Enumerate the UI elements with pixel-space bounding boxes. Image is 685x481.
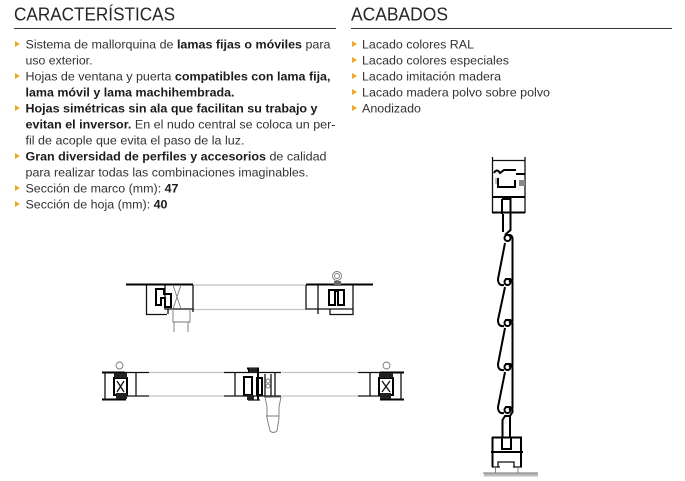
central handle — [265, 397, 281, 432]
right eye fitting — [332, 272, 342, 286]
top box — [492, 157, 525, 213]
left profile — [156, 289, 171, 307]
right fitting — [379, 362, 393, 399]
item: simétricas: Hojas simétricas sin ala que facilitan su trabajo y — [26, 102, 318, 116]
right profile — [329, 290, 344, 305]
finish: madera: Lacado imitación madera — [362, 70, 501, 84]
left transom outline — [173, 285, 190, 332]
item: lamas: Sistema de mallorquina de lamas fijas o móviles para — [26, 38, 331, 52]
item: hojas: Hojas de ventana y puerta compatibles con lama fija, — [26, 70, 330, 84]
left frame — [146, 285, 193, 314]
bottom frame — [491, 437, 523, 467]
top gasket — [496, 174, 525, 186]
drawing: horizontal section, bottom — [102, 362, 404, 432]
heading rule — [351, 28, 672, 29]
item: marco: Sección de marco (mm): 47 — [26, 182, 179, 196]
fixing feet — [496, 468, 518, 473]
glass lines — [193, 285, 306, 310]
item: hoja: Sección de hoja (mm): 40 — [26, 198, 168, 212]
feature list — [15, 38, 336, 212]
heading: características: CARACTERÍSTICAS — [14, 4, 175, 24]
item: perfiles, line 2: para realizar todas las combinaciones imaginables. — [26, 166, 308, 180]
finish: especiales: Lacado colores especiales — [362, 54, 509, 68]
item: lamas, line 2: uso exterior. — [26, 54, 92, 68]
item: hojas, line 2: lama móvil y lama machihembrada. — [26, 86, 234, 100]
louvers — [498, 235, 513, 416]
central mullion — [224, 368, 281, 400]
right leaf — [380, 372, 404, 400]
right frame — [306, 285, 353, 314]
item: simétricas, line 3: fil de acople que evita el paso de la luz. — [26, 134, 244, 148]
panel: características — [14, 4, 336, 212]
finish: RAL: Lacado colores RAL — [362, 38, 474, 52]
panel: acabados — [351, 4, 672, 116]
finishes list — [352, 38, 550, 116]
lower stile — [502, 416, 510, 437]
finish: polvo sobre polvo: Lacado madera polvo sobre polvo — [362, 86, 550, 100]
left top flange — [126, 284, 193, 286]
bullet markers — [15, 41, 20, 207]
drawing: vertical section — [483, 157, 538, 476]
leaf head — [492, 197, 525, 214]
left leaf — [102, 372, 126, 400]
item: perfiles: Gran diversidad de perfiles y accesorios de calidad — [26, 150, 327, 164]
top channel — [494, 170, 516, 187]
hatched ground — [483, 472, 538, 476]
left fitting — [114, 362, 127, 399]
heading rule — [14, 28, 336, 29]
right top flange — [306, 284, 373, 286]
upper stile — [503, 214, 510, 235]
heading: acabados: ACABADOS — [351, 4, 448, 24]
bullet markers — [352, 41, 357, 111]
drawing: horizontal section, top — [126, 272, 373, 332]
item: simétricas, line 2: evitan el inversor. En el nudo central se coloca un per- — [26, 118, 336, 132]
finish: anodizado: Anodizado — [362, 102, 421, 116]
glass lines — [148, 372, 358, 396]
